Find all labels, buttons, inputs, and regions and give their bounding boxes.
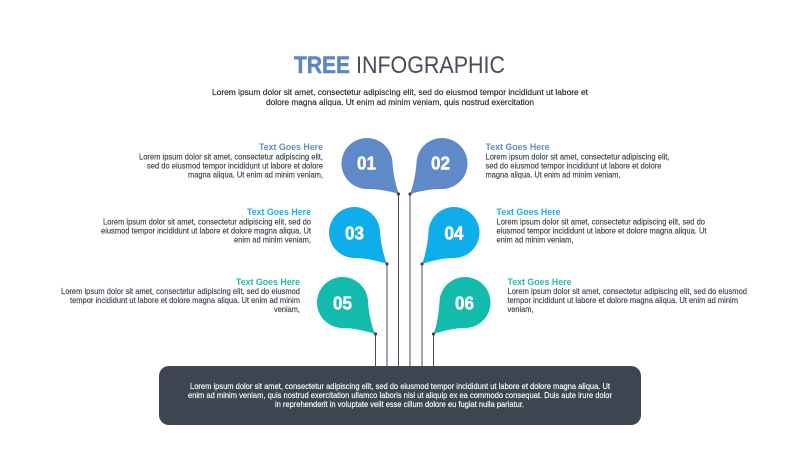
leaf 03: 03 <box>345 224 364 244</box>
leaf 06 <box>432 277 490 336</box>
text block 06 <box>508 277 747 314</box>
intro text: Lorem ipsum dolor sit amet, consectetur adipiscing elit, sed do eiusmod tempor incididunt ut labore et <box>212 87 589 97</box>
leaf 05 <box>317 277 377 336</box>
text block 03: Lorem ipsum dolor sit amet, consectetur adipiscing elit, sed do <box>103 216 311 226</box>
text block 01: Lorem ipsum dolor sit amet, consectetur adipiscing elit, <box>139 152 323 162</box>
text block 05: tempor incididunt ut labore et dolore magna aliqua. Ut enim ad minim <box>70 295 300 305</box>
text block 06: tempor incididunt ut labore et dolore magna aliqua. Ut enim ad minim <box>508 295 738 305</box>
bottom panel: enim ad minim veniam, quis nostrud exercitation ullamco laboris nisi ut aliquip ex ea commodo consequat. Duis aute irure dolor <box>188 390 612 400</box>
text block 03: Text Goes Here <box>247 207 311 218</box>
text block 01 <box>139 142 323 180</box>
title: INFOGRAPHIC <box>356 52 505 79</box>
text block 05: Lorem ipsum dolor sit amet, consectetur adipiscing elit, sed do eiusmod <box>61 286 300 296</box>
text block 03: eiusmod tempor incididunt ut labore et dolore magna aliqua. Ut <box>101 226 312 236</box>
text block 01: Text Goes Here <box>259 142 323 153</box>
bottom panel <box>159 366 641 425</box>
text block 02 <box>486 142 670 180</box>
leaf 04 <box>420 207 480 266</box>
text block 04: Lorem ipsum dolor sit amet, consectetur adipiscing elit, sed do <box>496 216 705 226</box>
text block 05: veniam, <box>274 304 300 314</box>
leaf 04: 04 <box>444 224 464 244</box>
text block 04 <box>496 207 707 244</box>
text block 06: Lorem ipsum dolor sit amet, consectetur adipiscing elit, sed do eiusmod <box>508 286 747 296</box>
text block 03 <box>101 207 312 244</box>
text block 06: veniam, <box>508 304 534 314</box>
text block 02: magna aliqua. Ut enim ad minim veniam, <box>486 170 620 180</box>
text block 05: Text Goes Here <box>236 277 300 288</box>
leaf 03 <box>329 207 389 266</box>
tree trunk lines <box>376 194 434 366</box>
leaf 01 <box>342 138 400 196</box>
leaf 01: 01 <box>357 154 376 174</box>
title: TREE <box>294 52 350 79</box>
leaf 02 <box>408 138 468 196</box>
text block 02: sed do eiusmod tempor incididunt ut labore et dolore <box>486 160 662 170</box>
text block 04: enim ad minim veniam, <box>496 234 574 244</box>
text block 04: Text Goes Here <box>496 207 560 218</box>
text block 04: eiusmod tempor incididunt ut labore et dolore magna aliqua. Ut <box>496 226 707 236</box>
text block 05 <box>61 277 300 314</box>
text block 02: Text Goes Here <box>486 142 550 153</box>
bottom panel: in reprehenderit in voluptate velit esse cillum dolore eu fugiat nulla pariatur. <box>275 399 524 409</box>
text block 01: sed do eiusmod tempor incididunt ut labore et dolore <box>147 160 323 170</box>
leaf 02: 02 <box>431 154 450 174</box>
bottom panel: Lorem ipsum dolor sit amet, consectetur adipiscing elit, sed do eiusmod tempor incididunt ut labore et dolore magna aliqua. Ut <box>190 381 611 391</box>
text block 03: enim ad minim veniam, <box>234 234 311 244</box>
intro text <box>212 87 589 107</box>
title <box>294 52 505 79</box>
text block 06: Text Goes Here <box>508 277 572 288</box>
text block 02: Lorem ipsum dolor sit amet, consectetur adipiscing elit, <box>486 152 670 162</box>
text block 01: magna aliqua. Ut enim ad minim veniam, <box>188 170 323 180</box>
leaf 05: 05 <box>333 294 352 314</box>
leaf 06: 06 <box>455 294 474 314</box>
intro text: dolore magna aliqua. Ut enim ad minim veniam, quis nostrud exercitation <box>266 97 534 107</box>
